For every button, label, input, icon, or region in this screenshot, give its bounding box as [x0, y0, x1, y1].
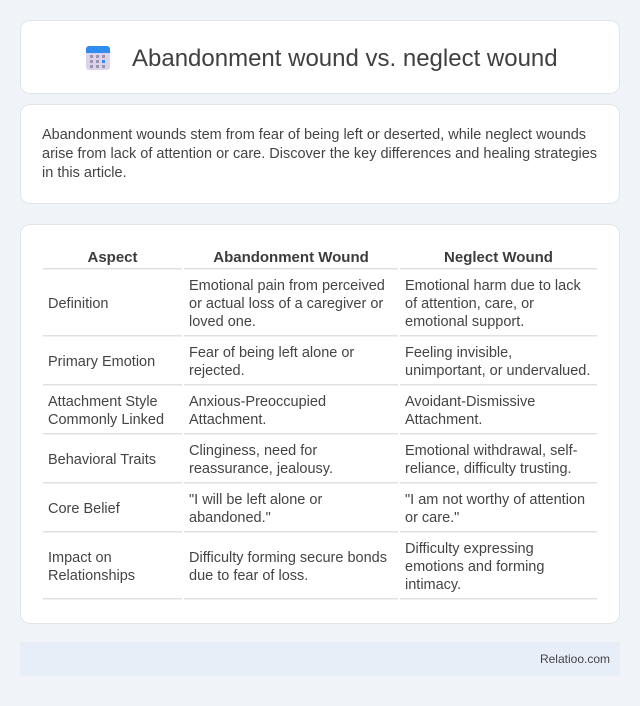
row: primary emotion: Fear of being left alone or	[189, 345, 354, 361]
row: definition: of attention, care, or	[405, 296, 534, 312]
table header: Aspect	[87, 249, 138, 266]
row: core belief: Core Belief	[48, 501, 120, 517]
comparison table card	[20, 224, 620, 624]
row: attachment style: Attachment.	[189, 412, 266, 428]
row: primary emotion: unimportant, or undervalued.	[405, 363, 590, 379]
row: primary emotion: Feeling invisible,	[405, 345, 512, 361]
row: behavioral traits	[48, 443, 577, 477]
icon: calendar	[86, 46, 110, 70]
row: attachment style: Anxious-Preoccupied	[189, 394, 326, 410]
row: impact on relationships: Impact on	[48, 550, 112, 566]
row: impact on relationships	[48, 541, 544, 593]
row: definition: or actual loss of a caregiver or	[189, 296, 383, 312]
row: behavioral traits: Emotional withdrawal, self-	[405, 443, 577, 459]
row: core belief	[48, 492, 585, 526]
intro text: in this article.	[42, 165, 127, 181]
row: impact on relationships: emotions and forming	[405, 559, 544, 575]
row: core belief: abandoned."	[189, 510, 271, 526]
row: core belief: "I am not worthy of attention	[405, 492, 585, 508]
row: impact on relationships: intimacy.	[405, 577, 461, 593]
row: impact on relationships: Difficulty expressing	[405, 541, 534, 557]
row: behavioral traits: reassurance, jealousy.	[189, 461, 333, 477]
title: Abandonment wound vs. neglect wound	[132, 45, 558, 72]
row: attachment style: Commonly Linked	[48, 412, 164, 428]
footer bar	[20, 642, 620, 676]
row: attachment style: Attachment Style	[48, 394, 158, 410]
row: attachment style: Attachment.	[405, 412, 482, 428]
intro text: Abandonment wounds stem from fear of being left or deserted, while neglect wounds	[42, 127, 586, 143]
row: behavioral traits: reliance, difficulty trusting.	[405, 461, 572, 477]
footer text: Relatioo.com	[540, 652, 610, 666]
row: attachment style	[48, 394, 535, 428]
row: primary emotion	[48, 345, 590, 379]
row: primary emotion: Primary Emotion	[48, 354, 155, 370]
row: primary emotion: rejected.	[189, 363, 245, 379]
row dividers	[43, 268, 597, 600]
row: behavioral traits: Behavioral Traits	[48, 452, 156, 468]
intro card	[20, 104, 620, 204]
table header	[87, 249, 553, 266]
row: behavioral traits: Clinginess, need for	[189, 443, 317, 459]
header card	[20, 20, 620, 94]
row: definition: Definition	[48, 296, 108, 312]
row: definition: Emotional pain from perceived	[189, 278, 385, 294]
table header: Abandonment Wound	[213, 249, 369, 266]
row: definition: loved one.	[189, 314, 256, 330]
row: impact on relationships: Difficulty forming secure bonds	[189, 550, 387, 566]
intro text	[42, 127, 597, 181]
table header: Neglect Wound	[444, 249, 553, 266]
row: core belief: "I will be left alone or	[189, 492, 322, 508]
row: impact on relationships: due to fear of loss.	[189, 568, 308, 584]
row: impact on relationships: Relationships	[48, 568, 135, 584]
row: definition: Emotional harm due to lack	[405, 278, 581, 294]
row: definition: emotional support.	[405, 314, 524, 330]
row: core belief: or care."	[405, 510, 459, 526]
row: attachment style: Avoidant-Dismissive	[405, 394, 535, 410]
row: definition	[48, 278, 581, 330]
intro text: arise from lack of attention or care. Discover the key differences and healing strategies	[42, 146, 597, 162]
